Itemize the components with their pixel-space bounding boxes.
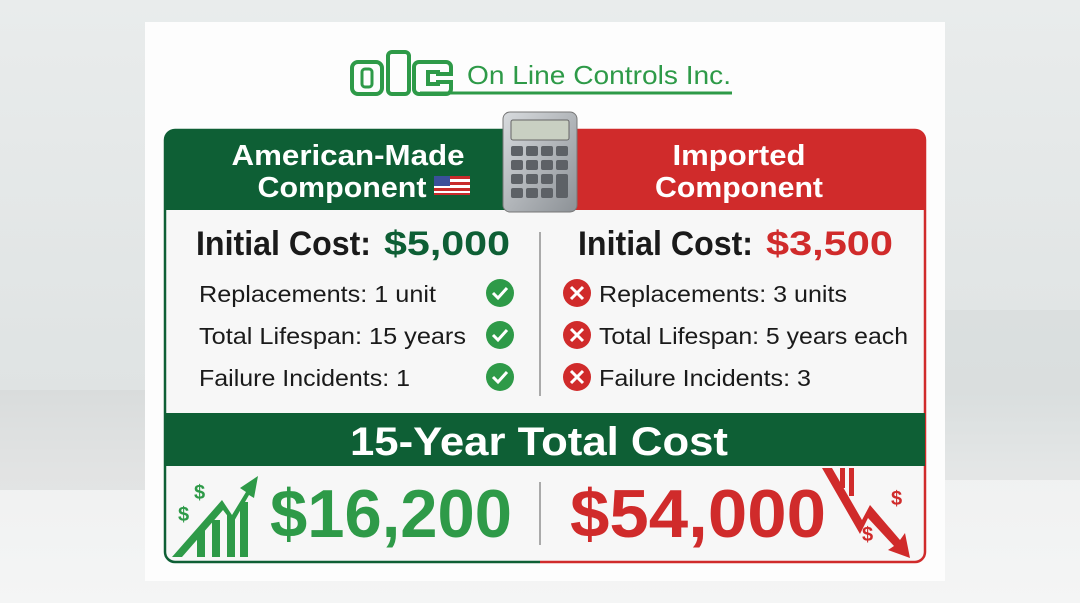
text: american details: $5,000 (384, 225, 510, 263)
icon: rising chart: $ (178, 504, 189, 526)
header: imported: Imported (672, 140, 806, 172)
value: american total: $16,200 (270, 476, 512, 552)
icons: checks (486, 279, 514, 391)
total cost banner (165, 413, 925, 466)
header: american: Component (258, 172, 427, 204)
icon: falling chart (822, 468, 910, 558)
header: american: American-Made (232, 140, 464, 172)
text: imported details: Total Lifespan: 5 years each (599, 323, 908, 349)
text: imported details (578, 225, 908, 391)
text: imported details: Initial Cost: (578, 225, 753, 263)
icon: falling chart: $ (891, 488, 902, 510)
text: imported details: Replacements: 3 units (599, 281, 847, 307)
icon: rising chart: $ (194, 482, 205, 504)
logo: On Line Controls Inc. (467, 60, 731, 90)
icon: rising chart (172, 476, 258, 557)
header: imported: Component (655, 172, 823, 204)
header: american (165, 130, 540, 210)
text: american details: Replacements: 1 unit (199, 281, 437, 307)
icons: crosses (563, 279, 591, 391)
card (145, 22, 945, 581)
icon: falling chart: $ (862, 524, 873, 546)
text: american details (196, 225, 510, 391)
text: imported details: $3,500 (766, 225, 893, 263)
text: imported details: Failure Incidents: 3 (599, 365, 811, 391)
panel: comparison (165, 112, 925, 562)
header: imported (540, 130, 925, 210)
total cost banner: 15-Year Total Cost (350, 420, 728, 464)
logo (352, 52, 732, 94)
icon: calculator (503, 112, 577, 212)
text: american details: Initial Cost: (196, 225, 371, 263)
text: american details: Total Lifespan: 15 years (199, 323, 466, 349)
value: imported total: $54,000 (570, 476, 826, 552)
text: american details: Failure Incidents: 1 (199, 365, 410, 391)
icon: US flag (434, 176, 470, 195)
